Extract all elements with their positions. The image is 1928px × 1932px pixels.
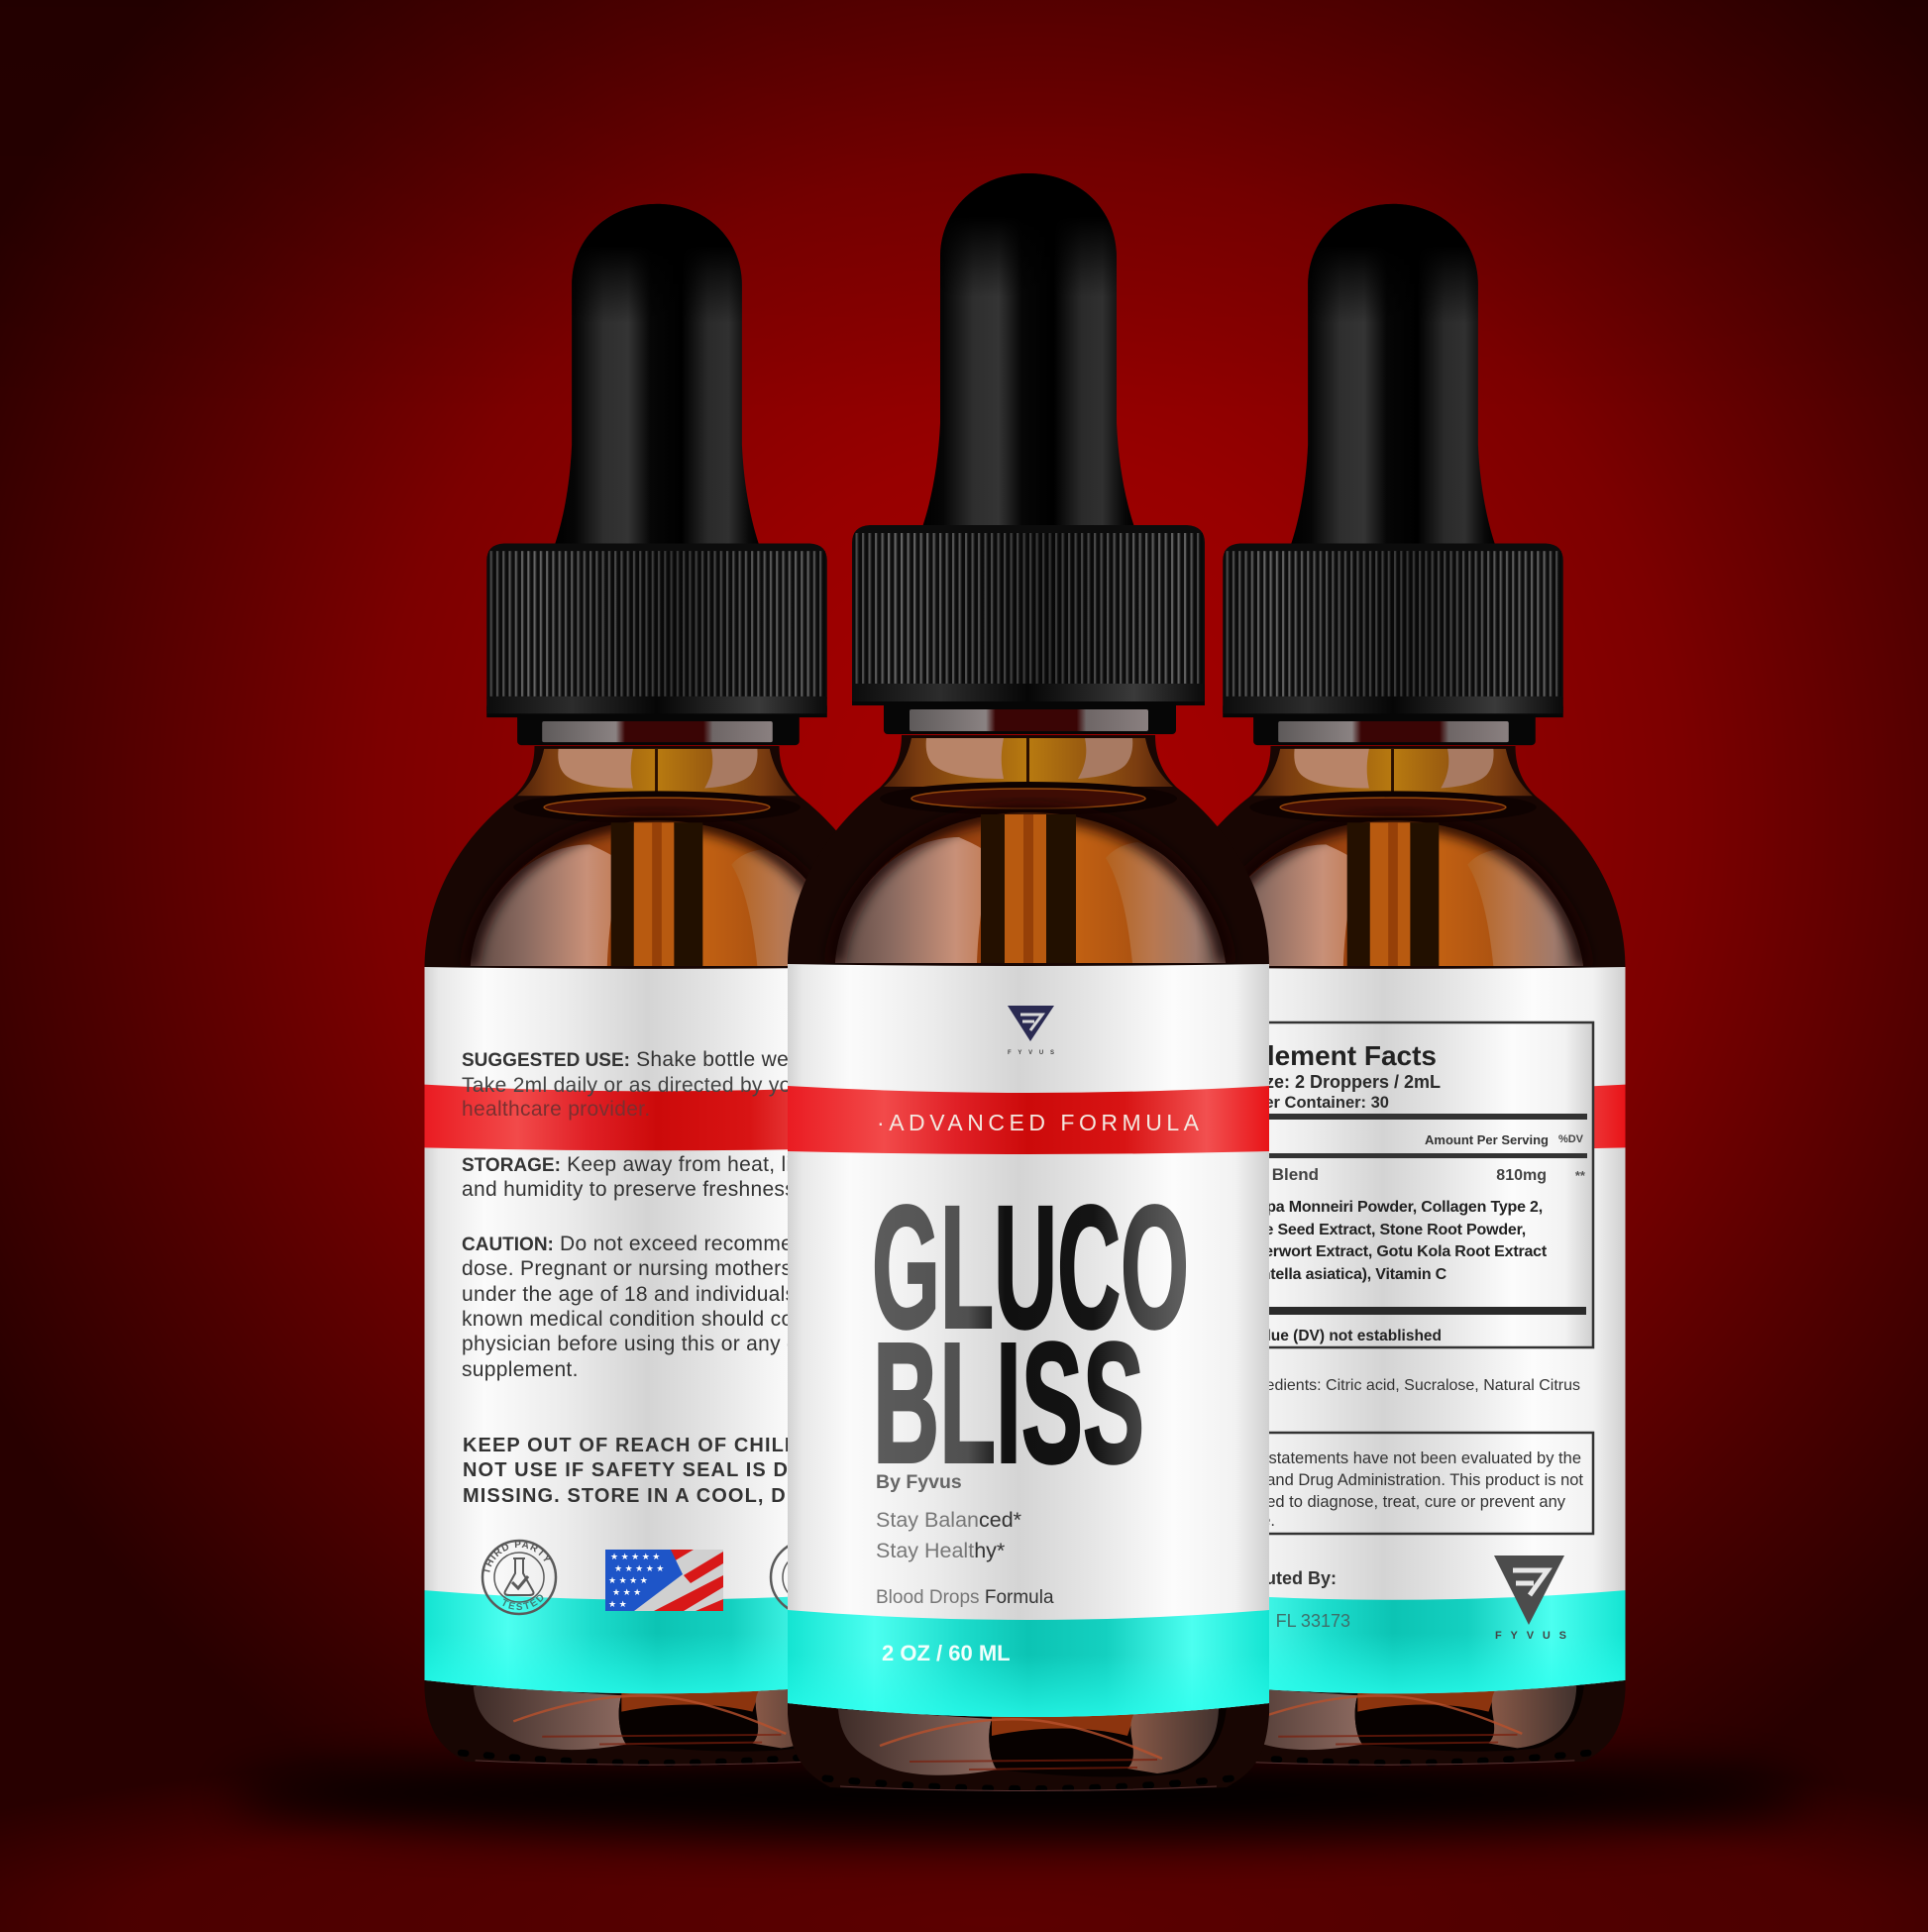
directions text: healthcare provider.	[462, 1098, 650, 1121]
left bottle: back label	[424, 204, 921, 1766]
directions text: CAUTION: Do not exceed recommended	[462, 1233, 840, 1255]
taglines: Stay Healthy*	[876, 1539, 1006, 1562]
title: gluco bliss	[872, 1171, 1189, 1498]
distributor: Distributed By:	[1209, 1568, 1337, 1588]
directions text: and humidity to preserve freshness.	[462, 1178, 802, 1201]
directions text: SUGGESTED USE: Shake bottle well.	[462, 1048, 804, 1071]
icon: fyvus logo	[1494, 1556, 1566, 1642]
directions text	[462, 1048, 879, 1381]
directions text: supplement.	[462, 1358, 579, 1381]
icon: american flag: ★ ★ ★ ★ ★	[614, 1563, 664, 1573]
right bottle: supplement facts label	[1161, 204, 1625, 1766]
warning text: MISSING. STORE IN A COOL, DRY PLACE.	[463, 1485, 901, 1507]
panel: supplement facts: 810mg	[1496, 1167, 1547, 1184]
directions text: physician before using this or any dietary	[462, 1333, 851, 1355]
icon: third party tested badge: THIRD PARTY	[483, 1542, 550, 1572]
panel: supplement facts: Servings Per Container: 30	[1180, 1094, 1389, 1112]
panel: supplement facts: Proprietary Blend	[1177, 1165, 1319, 1184]
icon: good manufacturing badge	[771, 1541, 844, 1614]
byline: By Fyvus	[876, 1471, 962, 1493]
icon: fyvus logo: FYVUS	[1495, 1630, 1566, 1642]
centre bottle: front label	[788, 173, 1269, 1791]
distributor: Miami, FL 33173	[1219, 1611, 1350, 1631]
warning text: KEEP OUT OF REACH OF CHILDREN. DO	[463, 1435, 891, 1456]
icon: third party tested badge: TESTED	[502, 1595, 543, 1611]
directions text: dose. Pregnant or nursing mothers, children	[462, 1257, 879, 1280]
ingredient list: Bacopa Monneiri Powder, Collagen Type 2,	[1229, 1199, 1543, 1216]
icon: american flag: ★ ★ ★	[612, 1587, 641, 1597]
directions text: known medical condition should consult	[462, 1308, 838, 1331]
panel: supplement facts: **	[1575, 1168, 1586, 1183]
panel: FDA disclaimer: These statements have not been evaluated by the	[1219, 1449, 1581, 1467]
icon: fyvus logo small	[1008, 1006, 1054, 1056]
panel: FDA disclaimer: disease.	[1215, 1512, 1275, 1530]
formula line: Blood Drops Formula	[876, 1587, 1054, 1608]
panel: FDA disclaimer: intended to diagnose, treat, cure or prevent any	[1222, 1493, 1566, 1511]
directions text: under the age of 18 and individuals with a	[462, 1283, 858, 1306]
panel: supplement facts	[1177, 1022, 1593, 1347]
ingredient list: Grape Seed Extract, Stone Root Powder,	[1229, 1222, 1526, 1238]
ingredient list: Motherwort Extract, Gotu Kola Root Extract	[1228, 1243, 1548, 1260]
other ingredients: Other Ingredients: Citric acid, Sucralose, Natural Citrus	[1195, 1377, 1580, 1394]
panel: supplement facts: Amount Per Serving	[1425, 1132, 1549, 1147]
panel: supplement facts: %DV	[1558, 1133, 1584, 1145]
directions text: STORAGE: Keep away from heat, light	[462, 1153, 821, 1176]
distributor	[1209, 1568, 1350, 1631]
ingredient list: (Centella asiatica), Vitamin C	[1236, 1266, 1447, 1283]
title: gluco bliss: GLUCO	[872, 1171, 1189, 1365]
panel: FDA disclaimer: Food and Drug Administration. This product is not	[1225, 1471, 1583, 1489]
icon: fyvus logo small: FYVUS	[1008, 1050, 1054, 1056]
icon: american flag	[605, 1550, 723, 1611]
facts heading: Supplement Facts	[1198, 1040, 1437, 1071]
floor shadow	[228, 1752, 1813, 1839]
warning text: NOT USE IF SAFETY SEAL IS DAMAGED OR	[463, 1459, 921, 1481]
icon: american flag: ★ ★	[608, 1599, 627, 1609]
warning text	[463, 1435, 921, 1507]
icon: third party tested badge	[482, 1540, 557, 1615]
panel: FDA disclaimer	[1189, 1433, 1593, 1534]
taglines	[876, 1508, 1022, 1562]
icon: american flag: ★ ★ ★ ★ ★	[610, 1552, 660, 1561]
directions text: Take 2ml daily or as directed by your	[462, 1074, 810, 1097]
panel: supplement facts: Serving Size: 2 Droppers / 2mL	[1178, 1072, 1441, 1092]
band text: advanced formula: ·ADVANCED FORMULA	[877, 1110, 1200, 1135]
ingredient list	[1228, 1199, 1548, 1283]
taglines: Stay Balanced*	[876, 1508, 1022, 1532]
panel: supplement facts: ** Daily Value (DV) not established	[1192, 1328, 1442, 1344]
title: gluco bliss: BLISS	[873, 1306, 1144, 1498]
size text: 2 OZ / 60 ML	[882, 1641, 1011, 1665]
icon: american flag: ★ ★ ★ ★	[608, 1575, 648, 1585]
